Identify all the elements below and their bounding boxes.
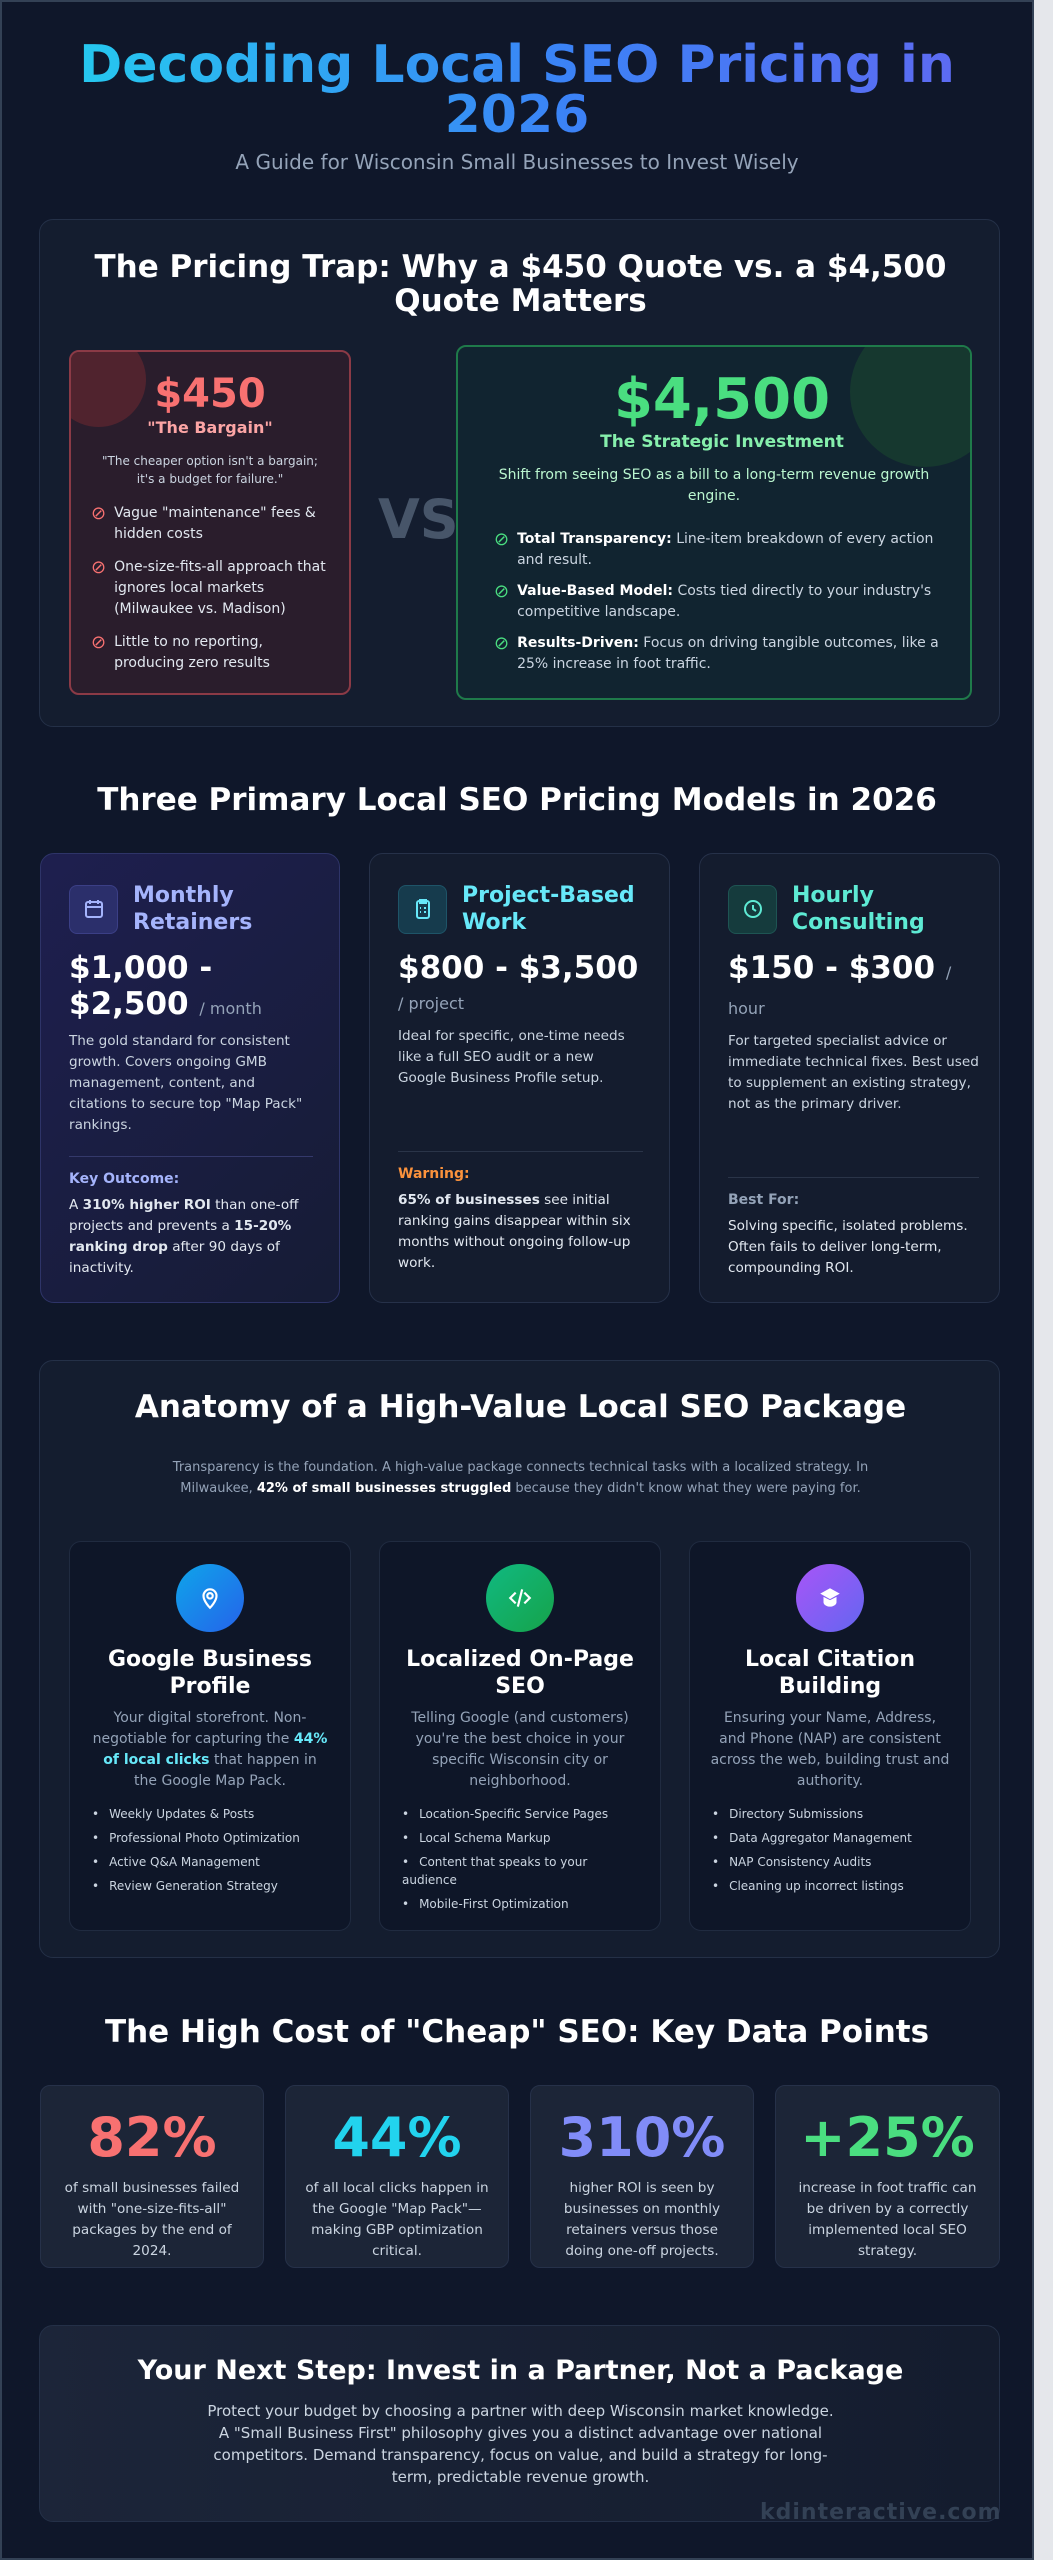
heading: anatomy: Anatomy of a High-Value Local SEO Package (135, 1389, 906, 1425)
stat: 310% (530, 2085, 754, 2268)
price: $450 (154, 371, 266, 417)
quote: "The cheaper option isn't a bargain; (102, 454, 318, 468)
list: bargain issues (91, 503, 326, 671)
stat: 310%: higher ROI is seen by businesses on monthly retainers versus those doing one-off projects. (564, 2180, 720, 2259)
subcard: GBP: Weekly Updates & Posts (109, 1807, 254, 1821)
subcard: citations: Ensuring your Name, Address, and Phone (NAP) are consistent across the web, building trust and authority. (711, 1710, 949, 1789)
card: project-based: Project-Based (462, 883, 635, 908)
list: bargain issues: ⊘ (91, 503, 106, 524)
subcard: citations: Building (779, 1674, 881, 1699)
card: project-based (369, 853, 670, 1303)
title: Decoding Local SEO Pricing in (79, 35, 955, 95)
card: $4,500 investment: Shift from seeing SEO as a bill to a long-term revenue growth engine. (499, 467, 929, 504)
list: bargain issues: ⊘ (91, 557, 106, 578)
price: $4,500 (614, 367, 830, 432)
stat: 44% (285, 2085, 509, 2268)
list: investment benefits: ⊘ (494, 633, 509, 654)
subcard: on-page (379, 1541, 661, 1931)
icon: calendar (69, 884, 118, 934)
subcard: GBP: Google Business (108, 1647, 312, 1672)
closing paragraph: Protect your budget by choosing a partner with deep Wisconsin market knowledge. (207, 2402, 834, 2420)
subcard: GBP: Your digital storefront. Non-negotiable for capturing the 44% of local clicks that happen in the Google Map Pack. (93, 1710, 327, 1789)
list: investment benefits: Results-Driven: Focus on driving tangible outcomes, like a 25% increase in foot traffic. (517, 635, 939, 672)
heading: pricing models: Three Primary Local SEO Pricing Models in 2026 (97, 782, 937, 818)
heading: pricing trap: The Pricing Trap: Why a $450 Quote vs. a $4,500 (94, 249, 946, 285)
subcard: GBP: Review Generation Strategy (109, 1879, 278, 1893)
subcard: on-page: Content that speaks to your audience (402, 1855, 587, 1887)
stat: 82%: of small businesses failed with "one-size-fits-all" packages by the end of 2024. (65, 2180, 239, 2259)
panel: pricing trap (39, 219, 1000, 727)
card: hourly consulting (699, 853, 1000, 1303)
card: hourly consulting: $150 - $300 / (728, 950, 951, 986)
closing paragraph: A "Small Business First" philosophy gives you a distinct advantage over national competitors. Demand transparency, focus on value, and build a strategy for long-term, predictable revenue growth. (213, 2424, 828, 2486)
list: investment benefits (494, 529, 939, 672)
card: monthly retainers: $2,500 / month (69, 986, 262, 1022)
card: monthly retainers: Retainers (133, 910, 252, 935)
card: hourly consulting: For targeted specialist advice or immediate technical fixes. Best used to supplement an existing strategy, not as the primary driver. (728, 1033, 979, 1112)
card: project-based: Warning: (398, 1166, 470, 1182)
stat: 310%: 310% (559, 2106, 725, 2169)
stat: 82%: 82% (87, 2106, 217, 2169)
card: monthly retainers: $1,000 - (69, 950, 212, 986)
subcard: on-page: Mobile-First Optimization (419, 1897, 569, 1911)
heading: next step: Your Next Step: Invest in a Partner, Not a Package (138, 2355, 903, 2386)
list: investment benefits: Value-Based Model: Costs tied directly to your industry's competitive landscape. (517, 583, 931, 620)
card: project-based: / project (398, 994, 464, 1013)
subcard: on-page: Telling Google (and customers) you're the best choice in your specific Wisconsin city or neighborhood. (411, 1710, 629, 1789)
subcard: citations (689, 1541, 971, 1931)
subcard: citations: Data Aggregator Management (729, 1831, 912, 1845)
list: bargain issues: One-size-fits-all approach that ignores local markets (Milwaukee vs. Madison) (114, 559, 326, 617)
stat: 44%: of all local clicks happen in the Google "Map Pack"—making GBP optimization critical. (305, 2180, 489, 2259)
subcard: on-page: Localized On-Page (406, 1647, 634, 1672)
watermark: kdinteractive.com (760, 2500, 1002, 2525)
stat: +25%: increase in foot traffic can be driven by a correctly implemented local SEO strategy. (798, 2180, 976, 2259)
subcard: GBP (69, 1541, 351, 1931)
subcard: GBP: Professional Photo Optimization (109, 1831, 300, 1845)
card: hourly consulting: Best For: (728, 1192, 799, 1208)
card: hourly consulting: Consulting (792, 910, 925, 935)
stat: 44%: 44% (332, 2106, 462, 2169)
card: monthly retainers: The gold standard for consistent growth. Covers ongoing GMB management, content, and citations to secure top "Map Pack" rankings. (69, 1033, 302, 1133)
stat: +25% (775, 2085, 1000, 2268)
panel: next step (39, 2325, 1000, 2522)
card: project-based: 65% of businesses see initial ranking gains disappear within six months without ongoing follow-up work. (398, 1192, 631, 1271)
list: bargain issues: Vague "maintenance" fees & hidden costs (114, 505, 316, 542)
card: $450 bargain: "The Bargain" (147, 418, 273, 437)
card: monthly retainers: Monthly (133, 883, 234, 908)
title: 2026 (445, 85, 589, 145)
list: investment benefits: ⊘ (494, 581, 509, 602)
card: monthly retainers: A 310% higher ROI than one-off projects and prevents a 15-20% ranking drop after 90 days of inactivity. (69, 1197, 299, 1276)
quote (102, 454, 318, 486)
vs label: VS (378, 488, 459, 551)
card: hourly consulting: hour (728, 999, 765, 1018)
icon: code (486, 1564, 554, 1632)
stat: 82% (40, 2085, 264, 2268)
icon: map pin (176, 1564, 244, 1632)
card: $450 bargain (69, 350, 351, 695)
quote: it's a budget for failure." (137, 472, 283, 486)
heading: pricing trap: Quote Matters (394, 283, 647, 319)
subcard: citations: Directory Submissions (729, 1807, 863, 1821)
subcard: citations: Cleaning up incorrect listings (729, 1879, 904, 1893)
subcard: on-page: SEO (495, 1674, 545, 1699)
card: monthly retainers: Key Outcome: (69, 1171, 179, 1187)
subcard: GBP: Profile (170, 1674, 250, 1699)
icon: clock (728, 884, 777, 934)
subcard: on-page: Local Schema Markup (419, 1831, 550, 1845)
icon: clipboard (398, 884, 447, 934)
header (79, 35, 955, 174)
card: monthly retainers (40, 853, 340, 1303)
list: investment benefits: Total Transparency: Line-item breakdown of every action and result. (517, 531, 933, 568)
heading: pricing trap (94, 249, 946, 319)
subtitle: A Guide for Wisconsin Small Businesses to Invest Wisely (235, 150, 799, 174)
list: bargain issues: ⊘ (91, 632, 106, 653)
title (2, 40, 1032, 140)
subcard: GBP: Active Q&A Management (109, 1855, 260, 1869)
list: investment benefits: ⊘ (494, 529, 509, 550)
card: hourly consulting: Solving specific, isolated problems. Often fails to deliver long-term, compounding ROI. (728, 1218, 968, 1276)
icon: badge (796, 1564, 864, 1632)
panel: anatomy (39, 1360, 1000, 1958)
card: project-based: Work (462, 910, 526, 935)
heading: key data points: The High Cost of "Cheap" SEO: Key Data Points (105, 2014, 929, 2050)
intro text: Transparency is the foundation. A high-value package connects technical tasks with a localized strategy. In Milwaukee, 42% of small businesses struggled because they didn't know what they were paying for. (173, 1460, 868, 1496)
subcard: on-page: Location-Specific Service Pages (419, 1807, 608, 1821)
card: project-based: $800 - $3,500 (398, 950, 638, 986)
card: hourly consulting: Hourly (792, 883, 874, 908)
subcard: citations: Local Citation (745, 1647, 915, 1672)
card: $4,500 investment (456, 345, 972, 700)
subcard: citations: NAP Consistency Audits (729, 1855, 871, 1869)
list: bargain issues: Little to no reporting, producing zero results (114, 634, 270, 671)
card: $4,500 investment: The Strategic Investment (600, 432, 844, 452)
stat: +25%: +25% (800, 2106, 975, 2169)
card: project-based: Ideal for specific, one-time needs like a full SEO audit or a new Google Business Profile setup. (398, 1028, 625, 1086)
